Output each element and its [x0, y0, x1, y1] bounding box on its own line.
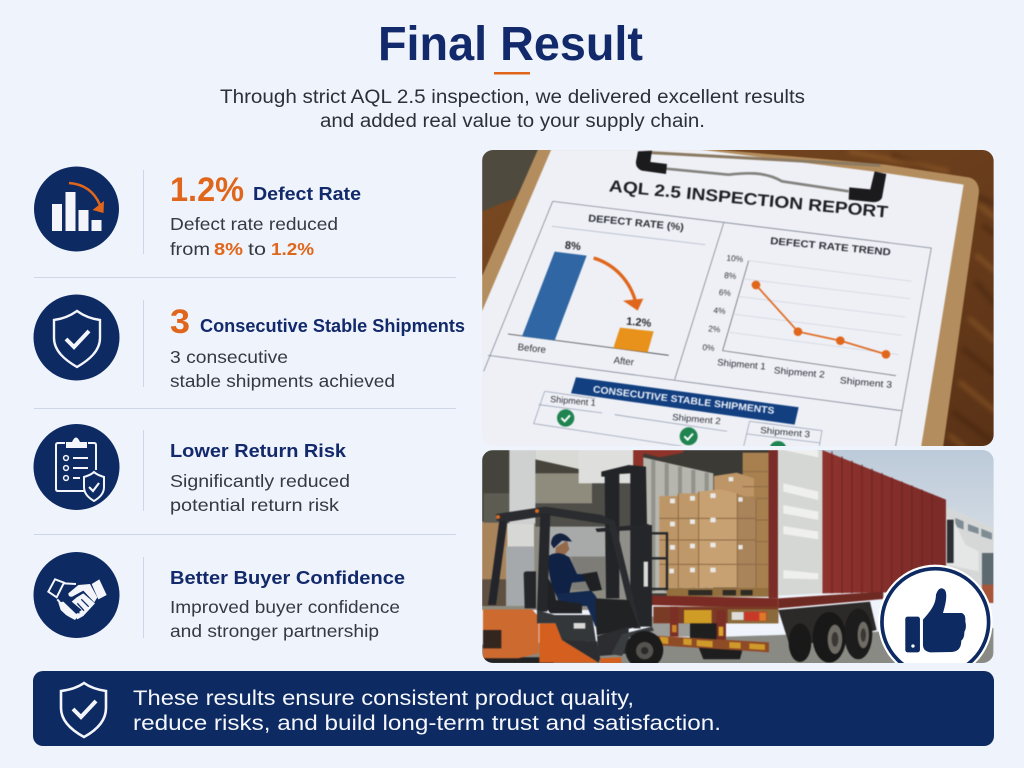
description: defect rate — [170, 214, 338, 259]
icon: handshake — [34, 552, 120, 638]
warehouse behind forklift — [482, 450, 635, 610]
panel: buyer confidence — [34, 552, 405, 641]
line chart: DEFECT RATE TREND — [770, 236, 891, 259]
driver — [523, 532, 602, 636]
bar chart: Before — [517, 342, 546, 356]
line chart: 6% — [718, 287, 732, 298]
consecutive stable shipments table: Shipment 3 — [760, 425, 810, 439]
description: defect rate: 8% — [214, 239, 243, 259]
red container side — [822, 450, 946, 593]
bar chart — [508, 213, 705, 369]
stat: 1.2% defect rate: Defect Rate — [253, 184, 361, 204]
stat: 3 consecutive stable shipments: 3 — [170, 303, 190, 341]
badge: thumbs up — [878, 564, 992, 663]
intro text: and added real value to your supply chain. — [320, 111, 705, 132]
ground — [482, 628, 994, 665]
description: defect rate: 1.2% — [271, 239, 314, 259]
icon: bar chart with down arrow — [34, 166, 119, 252]
intro text: Through strict AQL 2.5 inspection, we delivered excellent results — [220, 87, 805, 108]
icon: clipboard with shield — [34, 424, 120, 510]
photo: forklift loading container truck — [482, 448, 995, 679]
description: lower return risk: Significantly reduced — [170, 471, 350, 491]
title: Final Result — [378, 18, 643, 71]
truck wheels — [778, 602, 877, 647]
description: stable shipments: 3 consecutive — [170, 347, 288, 367]
panel: lower return risk — [34, 424, 350, 515]
warehouse on right — [945, 506, 994, 591]
consecutive stable shipments table: Shipment 1 — [550, 394, 596, 408]
consecutive stable shipments table: Shipment 2 — [672, 412, 721, 426]
forklift — [483, 465, 667, 669]
bar chart: After — [613, 355, 635, 369]
line chart: 10% — [726, 253, 744, 264]
pallet — [667, 588, 770, 597]
body — [595, 598, 639, 635]
description: lower return risk: potential return risk — [170, 495, 339, 515]
safety cage — [496, 507, 615, 525]
report title: AQL 2.5 INSPECTION REPORT — [608, 176, 889, 222]
line chart: 4% — [713, 305, 727, 316]
mast — [601, 465, 647, 598]
banner: closing statement — [33, 671, 994, 746]
stat: 1.2% defect rate — [170, 171, 361, 209]
banner text: These results ensure consistent product quality, — [133, 687, 634, 710]
line chart: Shipment 3 — [839, 375, 892, 390]
stat: 3 consecutive stable shipments: Consecutive Stable Shipments — [200, 316, 465, 336]
panel: defect rate — [34, 166, 361, 259]
truck cab — [946, 518, 979, 571]
description: defect rate: Defect rate reduced — [170, 214, 338, 234]
panel: stable shipments — [34, 294, 465, 391]
consecutive stable shipments table: CONSECUTIVE STABLE SHIPMENTS — [592, 384, 776, 417]
sky — [815, 448, 995, 555]
icon: banner shield check — [61, 683, 106, 737]
photo: inspection report on clipboard — [482, 148, 996, 458]
consecutive stable shipments table — [532, 376, 823, 446]
line chart: Shipment 2 — [773, 365, 825, 380]
report paper — [482, 149, 964, 448]
clip — [636, 151, 886, 202]
clipboard board — [482, 148, 979, 448]
report frames — [484, 201, 931, 448]
stat: 1.2% defect rate: 1.2% — [170, 171, 244, 209]
intro text — [220, 87, 805, 132]
cargo boxes — [743, 453, 769, 593]
bar chart: DEFECT RATE (%) — [588, 213, 684, 234]
description: buyer confidence — [170, 597, 400, 641]
line chart: 8% — [724, 270, 737, 281]
banner text: reduce risks, and build long-term trust and satisfaction. — [133, 712, 721, 735]
heading: buyer confidence: Better Buyer Confidence — [170, 568, 405, 588]
line chart: 2% — [708, 323, 721, 334]
stat: 3 consecutive stable shipments — [170, 303, 465, 341]
container interior — [633, 450, 773, 597]
description: lower return risk — [170, 471, 350, 515]
heading: lower return risk: Lower Return Risk — [170, 441, 347, 461]
description: defect rate: to — [248, 239, 266, 259]
description: stable shipments: stable shipments achieved — [170, 371, 395, 391]
description: buyer confidence: and stronger partnership — [170, 621, 379, 641]
line chart: 0% — [702, 342, 716, 353]
line chart: Shipment 1 — [717, 357, 766, 372]
open door — [778, 450, 822, 596]
bar chart: 8% — [564, 240, 581, 253]
door edge post — [769, 450, 778, 598]
bar chart: 1.2% — [626, 316, 652, 330]
description: defect rate: from — [170, 239, 210, 259]
description: buyer confidence: Improved buyer confidence — [170, 597, 400, 617]
banner text — [133, 687, 721, 735]
container and cargo — [633, 450, 946, 663]
chassis — [647, 595, 778, 608]
description: stable shipments — [170, 347, 395, 391]
icon: shield check — [34, 294, 120, 380]
line chart — [702, 236, 912, 390]
